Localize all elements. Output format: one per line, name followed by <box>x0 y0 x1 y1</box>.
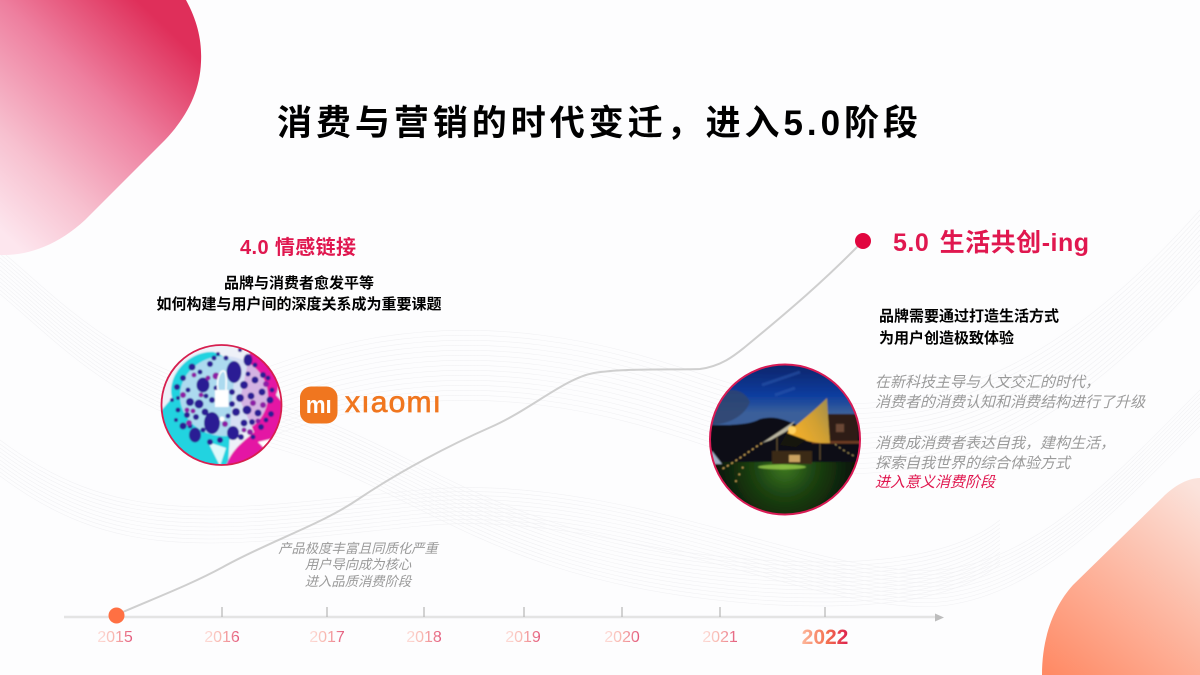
year labels: 2020 <box>604 629 640 646</box>
heading: 4.0: 4.0 情感链接 <box>240 236 356 259</box>
year labels: 2022 <box>802 626 848 649</box>
text block: meaning consumption stage: 探索自我世界的综合体验方式 <box>875 455 1072 472</box>
growth curve <box>116 241 863 615</box>
text block: quality consumption stage: 产品极度丰富且同质化严重 <box>278 541 439 556</box>
text block: meaning consumption stage: 消费成消费者表达自我，建构生活， <box>875 435 1115 452</box>
text block: 4.0 description <box>156 274 442 313</box>
decorative blob: top-left pink gradient <box>0 0 201 255</box>
image: night camping tent <box>708 363 862 516</box>
timeline axis <box>64 607 944 622</box>
decorative blob: bottom-right peach gradient <box>1042 478 1200 675</box>
year labels: 2016 <box>204 629 240 646</box>
year labels <box>97 626 848 649</box>
logo: Xiaomi: mı <box>306 392 332 419</box>
panel: 5.0 life co-creation <box>708 229 1146 516</box>
panel: 4.0 emotional connection <box>156 236 442 466</box>
heading: 5.0: 5.0 生活共创-ing <box>893 229 1089 257</box>
text block: quality consumption stage: 用户导向成为核心 <box>305 557 412 572</box>
text block: upgrade of consumer cognition <box>875 374 1146 411</box>
title: 消费与营销的时代变迁，进入5.0阶段 <box>277 104 918 143</box>
start dot: 2015 <box>108 608 124 624</box>
logo: Xiaomi <box>300 386 441 424</box>
text block: 4.0 description: 如何构建与用户间的深度关系成为重要课题 <box>156 295 442 313</box>
year labels: 2021 <box>702 629 738 646</box>
year labels: 2017 <box>309 629 345 646</box>
text block: 5.0 description: 品牌需要通过打造生活方式 <box>879 307 1059 325</box>
text block: 5.0 description <box>879 307 1059 347</box>
text block: 4.0 description: 品牌与消费者愈发平等 <box>224 274 374 292</box>
image: heads with open lock <box>160 344 284 466</box>
text block: quality consumption stage <box>278 541 439 589</box>
text block: quality consumption stage: 进入品质消费阶段 <box>305 574 413 589</box>
text block: upgrade of consumer cognition: 在新科技主导与人文交汇的时代， <box>875 374 1100 391</box>
text block: meaning consumption stage <box>875 435 1115 491</box>
text block: meaning consumption stage: 进入意义消费阶段 <box>875 474 997 491</box>
logo: Xiaomi: xıaomı <box>345 386 441 419</box>
text block: 5.0 description: 为用户创造极致体验 <box>879 329 1014 347</box>
text block: upgrade of consumer cognition: 消费者的消费认知和消费结构进行了升级 <box>875 394 1146 411</box>
year labels: 2018 <box>406 629 442 646</box>
end dot: 2022 <box>855 233 871 249</box>
year labels: 2019 <box>505 629 541 646</box>
year labels: 2015 <box>97 629 133 646</box>
